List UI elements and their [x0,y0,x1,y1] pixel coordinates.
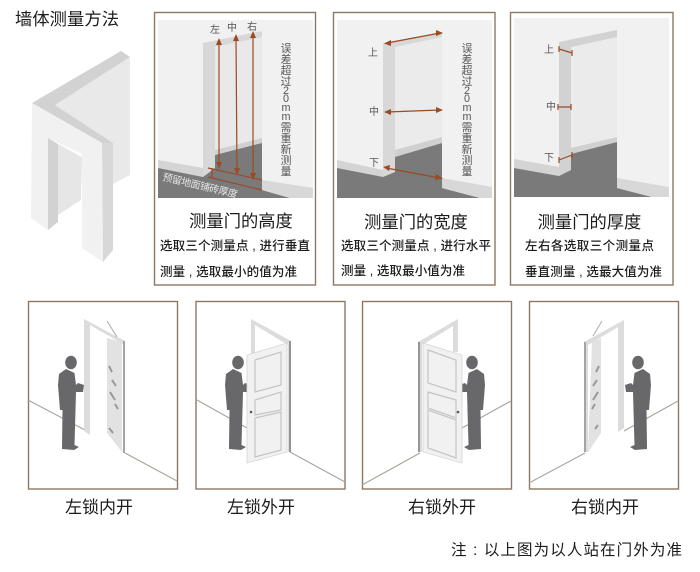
vertical error note: 误 [462,42,473,55]
labels top middle bottom: 上 [544,44,554,56]
vertical error note: m [462,111,472,123]
description [160,238,310,279]
heading: 测量门的宽度 [364,212,468,232]
door frame and leaf [84,319,125,453]
vertical error note: 差 [462,52,473,66]
wall lines [362,401,511,485]
panel: door height [154,12,316,285]
vertical error note: 需 [281,121,292,134]
description: 测量 , 选取最小值为准 [341,263,465,278]
labels left middle right: 左 [210,23,220,36]
labels top middle bottom [544,44,556,164]
vertical error note: 重 [281,131,292,145]
person [225,356,251,450]
vertical error note: 新 [462,142,473,156]
vertical error note: 2 [464,85,470,97]
height arrows [208,31,262,190]
labels top middle bottom: 中 [369,105,379,118]
caption: 右锁内开 [571,498,639,517]
vertical error note: 过 [281,75,292,88]
vertical error note: 需 [462,121,473,134]
door frame and leaf [418,319,462,463]
door width scene [337,20,492,198]
description [341,238,491,278]
vertical error note: m [282,111,290,123]
labels top middle bottom: 中 [546,100,556,113]
3D wall illustration [31,51,130,262]
floor tile note: 预留地面铺砖厚度 [161,170,239,201]
description: 测量 , 选取最小的值为准 [160,264,297,279]
width arrows [383,30,443,180]
panel: door width [334,12,495,285]
heading: 测量门的厚度 [538,212,641,232]
vertical error note: 重 [462,131,473,145]
thickness brackets [558,46,572,163]
heading: 测量门的高度 [189,211,293,231]
vertical error note: 过 [462,75,473,88]
vertical error note: 测 [281,154,292,167]
person [625,356,651,450]
labels top middle bottom: 上 [368,47,378,59]
vertical error note [462,42,473,178]
description: 垂直测量 , 选最大值为准 [525,264,662,279]
footnote: 注 : 以上图为以人站在门外为准 [451,541,682,559]
door frame and leaf [247,319,291,463]
vertical error note: 差 [281,52,292,66]
vertical error note: m [282,102,290,114]
door frame and leaf [584,320,624,452]
vertical error note: m [462,102,472,114]
labels left middle right: 右 [247,20,257,33]
vertical error note: 超 [281,63,292,77]
labels top middle bottom: 下 [369,158,379,169]
caption: 左锁内开 [65,498,133,517]
caption: 左锁外开 [227,498,295,517]
vertical error note: 测 [462,154,473,167]
panel: left lock outward [196,302,345,489]
description: 左右各选取三个测量点 [525,238,654,253]
labels left middle right [210,20,257,36]
labels top middle bottom: 下 [544,153,554,164]
vertical error note [281,42,292,178]
labels top middle bottom [368,47,379,169]
panel: door thickness [510,12,673,285]
door thickness scene [514,18,669,197]
vertical error note: 误 [281,42,292,55]
caption: 右锁外开 [408,498,476,517]
vertical error note: 量 [281,165,292,178]
vertical error note: 2 [283,85,289,97]
vertical error note: 0 [464,93,470,105]
description [525,238,662,279]
vertical error note: 量 [462,165,473,178]
panel: right lock inward [529,302,678,489]
description: 选取三个测量点 , 进行水平 [341,238,491,253]
panel: right lock outward [362,302,512,489]
person [459,356,485,450]
vertical error note: 0 [283,93,289,105]
title: 墙体测量方法 [15,9,119,29]
wall lines [28,400,177,481]
vertical error note: 新 [281,142,292,156]
description: 选取三个测量点 , 进行垂直 [160,238,310,253]
wall lines [529,401,678,483]
wall lines [197,400,345,482]
labels left middle right: 中 [227,21,237,34]
door height scene [158,20,313,198]
panel: left lock inward [28,302,178,489]
person [58,356,84,450]
vertical error note: 超 [462,63,473,77]
